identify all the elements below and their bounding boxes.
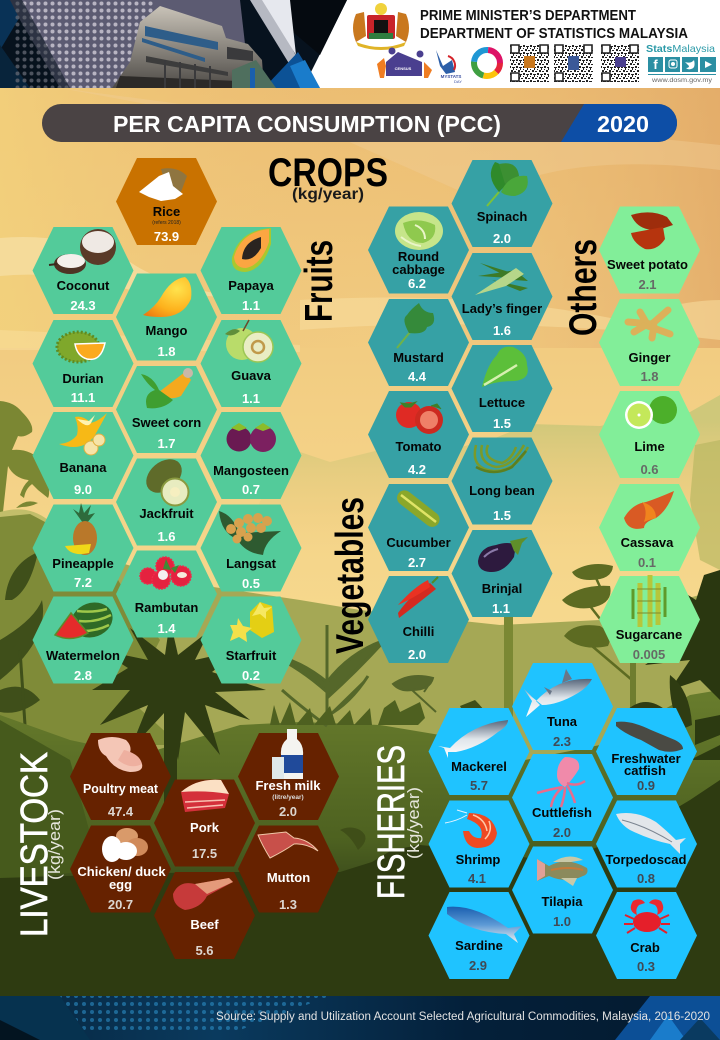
hex: coconut (32, 227, 134, 314)
icon: durian (57, 332, 105, 362)
hex: fresh milk (238, 729, 339, 820)
heading: fisheries: FISHERIES (371, 745, 413, 899)
icon: jackfruit (140, 452, 188, 506)
value: 4.4 (408, 369, 427, 384)
label line 2: cabbage (392, 262, 445, 277)
hex: starfruit (200, 596, 302, 684)
label: Poultry meat (83, 781, 159, 796)
value: 1.7 (157, 436, 176, 451)
hex: beef (154, 872, 255, 959)
value: 1.4 (157, 621, 176, 636)
icon: pork (181, 780, 229, 812)
value: 1.1 (492, 601, 510, 616)
label: Mutton (267, 870, 310, 885)
label: Sweet potato (607, 257, 688, 272)
hex: poultry meat (70, 733, 171, 820)
hex: cucumber (368, 484, 469, 571)
label: Sweet corn (132, 415, 201, 430)
icon: brinjal (478, 537, 528, 572)
title bar (42, 104, 677, 142)
hex: long bean (452, 438, 552, 524)
heading: others: Others (562, 239, 605, 336)
label: Rice (153, 204, 180, 219)
icon: mango (143, 277, 191, 317)
icon: lettuce (482, 347, 528, 387)
label: Crab (630, 940, 660, 955)
icon: poultry meat (98, 737, 142, 772)
label: Langsat (226, 556, 277, 571)
icon: cucumber (394, 487, 443, 530)
icon: shrimp (445, 810, 497, 848)
value: 5.6 (195, 943, 214, 958)
hex: mustard (368, 299, 469, 386)
value: 2.9 (469, 958, 487, 973)
icon: sardine (447, 907, 522, 943)
panel: rice (116, 158, 217, 245)
hex: mutton (238, 826, 339, 912)
icon: cassava (624, 491, 674, 529)
icon: crab (624, 899, 670, 933)
value: 2.8 (74, 668, 92, 683)
hex: tilapia (512, 846, 613, 934)
label: Watermelon (46, 648, 120, 663)
value: 4.1 (468, 871, 486, 886)
icon: pineapple (65, 503, 97, 555)
hex: jackfruit (116, 452, 217, 546)
icon: cuttlefish (537, 757, 585, 807)
hex: tomato (368, 391, 469, 478)
value: 5.7 (470, 778, 488, 793)
icon: Malaysia coat of arms (353, 3, 409, 50)
value: 1.5 (493, 508, 511, 523)
label: Mustard (393, 350, 444, 365)
value: 0.2 (242, 668, 260, 683)
heading: department name: PRIME MINISTER’S DEPARTMENT (420, 7, 636, 24)
hex: lettuce (452, 345, 552, 432)
value: 11.1 (71, 390, 95, 405)
label: Tomato (396, 439, 442, 454)
hex: sugarcane (599, 575, 700, 663)
value: 17.5 (192, 846, 217, 861)
value: 2.0 (493, 231, 511, 246)
header banner (0, 0, 720, 88)
icon: census logo: CENSUS (395, 66, 412, 71)
value: 1.8 (157, 344, 176, 359)
label: Papaya (228, 278, 275, 293)
value: 0.5 (242, 576, 260, 591)
hex: cassava (599, 484, 700, 571)
icon: chilli (398, 577, 438, 618)
value: 7.2 (74, 575, 92, 590)
hex: mangosteen (200, 412, 302, 499)
label: Banana (60, 460, 107, 475)
value: 9.0 (74, 482, 92, 497)
panel: fisheries (428, 663, 697, 979)
StatsMalaysia social block: f (653, 57, 658, 72)
value: 1.6 (157, 529, 176, 544)
icon: banana (59, 413, 107, 455)
StatsMalaysia social block (646, 43, 716, 84)
hex: pork (154, 780, 255, 866)
label: Fresh milk (255, 778, 321, 793)
note: (refers 2018) (152, 220, 181, 226)
building photo (112, 6, 276, 88)
value: 0.7 (242, 482, 260, 497)
label: Mango (146, 323, 187, 338)
header geometric pattern (0, 0, 347, 88)
hex: mango (116, 274, 217, 360)
label: Round (398, 249, 439, 264)
value: 0.8 (637, 871, 655, 886)
heading: crops: CROPS (268, 151, 388, 195)
value: 47.4 (108, 804, 134, 819)
icon: tilapia (537, 856, 588, 886)
icon: starfruit (230, 602, 274, 642)
value: 2.0 (408, 647, 426, 662)
label: Cucumber (386, 535, 451, 550)
icon: guava (225, 320, 273, 362)
label: Pineapple (52, 556, 114, 571)
hex: ginger (599, 299, 700, 386)
value: 0.9 (637, 778, 655, 793)
hex: rambutan (116, 550, 217, 638)
icon: spinach (487, 162, 528, 206)
icon: lady's finger (475, 263, 528, 295)
icon: sweet potato (631, 212, 673, 249)
icon: long bean (475, 445, 528, 472)
icon: watermelon (55, 597, 118, 643)
label: Torpedoscad (606, 852, 687, 867)
label: Sugarcane (616, 627, 682, 642)
icon: lime (625, 396, 677, 429)
heading: fruits: Fruits (298, 240, 341, 322)
icon: milk bottle (272, 729, 303, 779)
footer band (0, 996, 720, 1040)
icon: sweet corn (141, 368, 193, 408)
note: (litre/year) (272, 794, 304, 801)
heading: vegetables: Vegetables (329, 497, 372, 654)
label: Spinach (477, 209, 527, 224)
hex: sardine (428, 892, 530, 979)
label: Mackerel (451, 759, 507, 774)
icon: rice sack (139, 168, 187, 201)
heading: crops: (kg/year) (292, 186, 364, 203)
panel: others (599, 206, 700, 663)
heading: livestock: LIVESTOCK (14, 752, 56, 937)
label: Guava (231, 368, 272, 383)
label: Lime (634, 439, 665, 454)
value: 2.0 (553, 825, 571, 840)
icon: eggs (102, 828, 148, 862)
label: Cassava (621, 535, 674, 550)
source note: Source: Supply and Utilization Account Selected Agricultural Commodities, Malaysia, 2016-2020 (216, 1011, 710, 1023)
value: 0.6 (640, 462, 659, 477)
value: 1.1 (242, 298, 260, 313)
StatsMalaysia social block: StatsMalaysia (646, 43, 715, 55)
label: Rambutan (135, 600, 198, 615)
value: 1.3 (279, 897, 297, 912)
hex: langsat (200, 504, 302, 592)
icon: papaya (232, 228, 271, 272)
label: Durian (62, 371, 104, 386)
hex: torpedo scad (596, 800, 697, 888)
label: Ginger (629, 350, 670, 365)
hex: watermelon (32, 596, 134, 684)
label: Chilli (403, 624, 434, 639)
icon: mustard (397, 303, 434, 348)
livestock unit: (kg/year) (45, 809, 64, 880)
hex: round cabbage (368, 206, 469, 294)
heading: department name: DEPARTMENT OF STATISTICS MALAYSIA (420, 25, 688, 42)
hex: chicken/duck egg (70, 826, 171, 912)
value: 6.2 (408, 276, 426, 291)
label: Jackfruit (139, 506, 194, 521)
value: 1.5 (493, 416, 511, 431)
hex: durian (32, 320, 134, 407)
label: Coconut (57, 278, 110, 293)
label: Brinjal (482, 581, 522, 596)
label: Freshwater (611, 751, 681, 766)
panel: vegetables (368, 160, 552, 663)
value: 2.1 (638, 277, 657, 292)
icon: mackerel (438, 720, 508, 758)
icon: tomato (396, 402, 443, 434)
value: 24.3 (70, 298, 96, 313)
value: 73.9 (154, 229, 179, 244)
icon: beef (173, 878, 233, 910)
value: 20.7 (108, 897, 133, 912)
icon: SDG wheel (474, 50, 500, 76)
icon: rambutan (140, 557, 191, 589)
value: 2.3 (553, 734, 571, 749)
StatsMalaysia social block: www.dosm.gov.my (651, 77, 713, 84)
icon: catfish (616, 722, 683, 752)
icon: coconut (49, 229, 116, 274)
label: Lettuce (479, 395, 525, 410)
icon: QR codes (510, 44, 639, 82)
value: 2.0 (279, 804, 297, 819)
value: 0.005 (633, 647, 665, 662)
value: 1.6 (493, 323, 511, 338)
hex: papaya (200, 227, 302, 314)
label: Lady’s finger (462, 301, 542, 316)
hex: brinjal (452, 530, 552, 617)
label: Mangosteen (213, 463, 289, 478)
value: 0.3 (637, 959, 655, 974)
icon: torpedo scad (616, 813, 686, 854)
value: 1.8 (640, 369, 659, 384)
icon: MyStats Day: MYSTATS (441, 74, 461, 79)
hex: spinach (452, 160, 552, 247)
hex: lime (599, 391, 700, 478)
hex: sweet potato (599, 206, 700, 294)
hex: tuna (512, 663, 613, 750)
icon: sugarcane (633, 575, 665, 627)
hex: freshwater catfish (596, 708, 697, 795)
icon: MyStats Day: DAY (454, 79, 462, 84)
heading: department name (420, 7, 688, 42)
hex: mackerel (428, 708, 530, 795)
title bar: PER CAPITA CONSUMPTION (PCC) (113, 111, 501, 137)
label: Shrimp (456, 852, 500, 867)
value: 0.1 (638, 555, 656, 570)
label: Pork (190, 820, 220, 835)
hex: crab (596, 892, 697, 979)
title bar: 2020 (597, 111, 649, 137)
label: Sardine (455, 938, 503, 953)
label line 2: egg (109, 877, 132, 892)
hex: guava (200, 320, 302, 407)
icon: tuna (524, 669, 592, 717)
value: 4.2 (408, 462, 426, 477)
icon: mutton (258, 832, 318, 858)
icon: census logo (377, 48, 432, 78)
hex: sweet corn (116, 366, 217, 453)
icon: MyStats Day (436, 50, 462, 84)
icon: langsat (219, 511, 281, 555)
label: Chicken/ duck (77, 864, 166, 879)
hex: pineapple (32, 503, 134, 592)
icon: round cabbage (395, 212, 443, 250)
value: 1.1 (242, 391, 260, 406)
value: 2.7 (408, 555, 426, 570)
label: Tilapia (542, 894, 583, 909)
hex: lady's finger (452, 253, 552, 340)
fisheries unit: (kg/year) (404, 787, 423, 859)
label: Cuttlefish (532, 805, 592, 820)
hex: chilli (368, 576, 469, 663)
icon: mangosteen (226, 423, 276, 452)
panel: livestock (70, 729, 339, 959)
label line 2: catfish (624, 763, 666, 778)
label: Long bean (469, 483, 535, 498)
icon: ginger (628, 310, 670, 338)
label: Tuna (547, 714, 578, 729)
hex: shrimp (428, 800, 530, 888)
hex: banana (32, 412, 134, 499)
panel: fruits (32, 227, 302, 684)
hex: cuttlefish (512, 754, 613, 841)
label: Starfruit (226, 648, 277, 663)
label: Beef (190, 917, 219, 932)
value: 1.0 (553, 914, 571, 929)
